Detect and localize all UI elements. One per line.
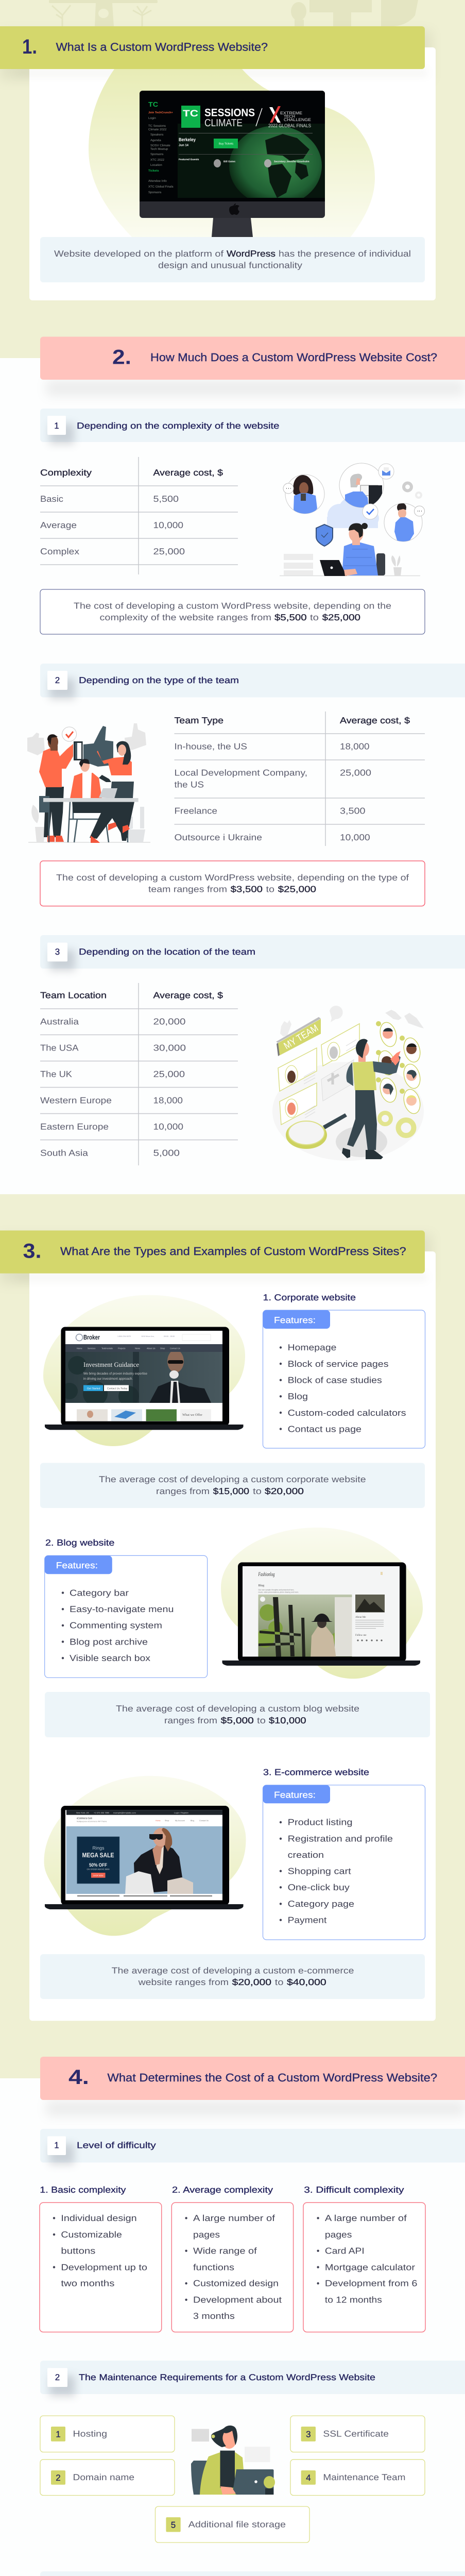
column: difficult complexity: Card API	[325, 2246, 365, 2256]
table: team location vs average cost: Australia	[40, 1017, 79, 1026]
card: maintenance team	[290, 2460, 425, 2496]
panel: blog features: Commenting system	[70, 1621, 162, 1631]
table: team type vs average cost: Average cost, $	[340, 716, 410, 725]
callout: complexity cost range: to	[310, 613, 319, 622]
table: team type vs average cost: Freelance	[174, 806, 217, 816]
column: basic complexity: two months	[61, 2279, 114, 2289]
cost box: blog website: $10,000	[269, 1716, 306, 1725]
icon: desktop monitor showing TC Sessions Climate site: Climate 2022	[148, 128, 167, 131]
panel: blog features: Blog post archive	[70, 1637, 148, 1647]
column: basic complexity: Individual design	[61, 2213, 137, 2223]
table: team type vs average cost: Outsource i Ukraine	[174, 833, 262, 842]
table: team location vs average cost	[40, 983, 238, 1165]
icon: desktop monitor showing TC Sessions Climate site: EXTREME	[280, 111, 302, 115]
laptop: corporate Broker site: News	[135, 1347, 140, 1350]
cost box: e-commerce website: $20,000	[232, 1977, 271, 1987]
panel: white card	[29, 47, 436, 300]
laptop: eCommerce Gem site: eCommerce Gem	[77, 1817, 92, 1820]
icon: desktop monitor showing TC Sessions Climate site: Join TechCrunch+	[148, 111, 173, 114]
heading: what determines the cost: What Determines the Cost of a Custom WordPress Website?	[107, 2071, 437, 2084]
cost box: corporate website: ranges from	[156, 1486, 210, 1496]
callout: team type cost range: $3,500	[231, 885, 263, 894]
table: team location vs average cost: 25,000	[153, 1070, 185, 1079]
subheading bar: complexity: Depending on the complexity of the website	[77, 421, 279, 431]
cost box: e-commerce website	[40, 1954, 425, 1999]
panel: blog features: Visible search box	[70, 1653, 151, 1663]
laptop: eCommerce Gem site: 50% OFF	[89, 1862, 107, 1868]
card: domain name: 2	[56, 2473, 61, 2483]
illustration: man picking my team profiles	[272, 1006, 424, 1161]
card: hosting: Hosting	[73, 2429, 107, 2439]
column: average complexity: pages	[193, 2230, 220, 2240]
panel: definition box	[40, 237, 425, 282]
laptop: eCommerce Gem site: My Account	[175, 1820, 185, 1822]
panel: corporate features: Features:	[274, 1315, 316, 1325]
subheading bar: complexity	[40, 409, 465, 444]
laptop: eCommerce Gem site: MEGA SALE	[82, 1852, 114, 1859]
panel: e-commerce features: Category page	[288, 1899, 354, 1909]
card: maintenance team: 4	[306, 2473, 311, 2483]
panel: e-commerce features: Payment	[288, 1915, 327, 1925]
item title: blog website: 2. Blog website	[45, 1538, 114, 1548]
illustration: woman at laptop	[191, 2426, 275, 2495]
icon: desktop monitor showing TC Sessions Climate site: Speakers	[150, 133, 163, 137]
table: complexity vs average cost: Complex	[40, 547, 80, 556]
card: domain name	[40, 2460, 175, 2496]
panel: corporate features: Contact us page	[288, 1424, 361, 1434]
laptop: Fashionlog blog site: Blog	[259, 1584, 264, 1587]
icon: desktop monitor showing TC Sessions Climate site: Attendee Info	[148, 179, 167, 183]
subheading bar: type of team	[40, 664, 465, 699]
column: average complexity: 2. Average complexity	[172, 2185, 273, 2195]
subheading bar: location of team	[40, 935, 465, 971]
subheading bar: type of team: Depending on the type of the team	[79, 675, 239, 685]
laptop: Fashionlog blog site: About Me	[355, 1616, 366, 1619]
callout: team type cost range: $25,000	[278, 885, 316, 894]
column: basic complexity	[40, 2185, 162, 2332]
definition text: Website developed on the platform of	[54, 249, 223, 259]
card: hosting	[40, 2416, 175, 2452]
table: team location vs average cost: The UK	[40, 1070, 73, 1079]
item title: corporate website: 1. Corporate website	[263, 1293, 356, 1302]
column: average complexity: Wide range of	[193, 2246, 257, 2256]
icon: desktop monitor showing TC Sessions Climate site: XTC Global Finals	[148, 185, 174, 189]
icon: desktop monitor showing TC Sessions Climate site: TC Sessions	[148, 124, 166, 128]
callout: complexity cost range	[40, 589, 425, 634]
column: difficult complexity: Development from 6	[325, 2279, 417, 2289]
number 2: 2.	[112, 346, 131, 369]
column: basic complexity: Customizable	[61, 2230, 122, 2240]
table: team type vs average cost: 3,500	[340, 806, 366, 816]
laptop: corporate Broker site: Get Started	[87, 1387, 100, 1390]
illustration blob	[89, 69, 375, 242]
laptop: Fashionlog blog site: music, video presentations, photo sharing and more.	[259, 1591, 299, 1593]
panel: e-commerce features: creation	[288, 1850, 324, 1860]
table: team location vs average cost: Average cost, $	[153, 990, 223, 1001]
card: SSL certificate: 3	[306, 2430, 311, 2439]
laptop: corporate Broker site: What we Offer	[182, 1413, 203, 1417]
heading: How Much Does a Custom WordPress Website Cost: How Much Does a Custom WordPress Website Cost?	[150, 351, 437, 364]
table: team type vs average cost: the US	[174, 780, 204, 789]
column: basic complexity: buttons	[61, 2246, 95, 2256]
panel: e-commerce features: One-click buy	[288, 1883, 350, 1892]
callout: complexity cost range: The cost of developing a custom WordPress website, depending on the	[74, 601, 391, 611]
icon: desktop monitor showing TC Sessions Climate site: TC	[148, 100, 159, 108]
subheading bar: type of team: 2	[55, 675, 60, 685]
callout: team type cost range: to	[266, 885, 274, 894]
cost box: corporate website	[40, 1463, 425, 1508]
panel: corporate features	[263, 1310, 425, 1448]
cost box: blog website: $5,000	[221, 1716, 254, 1725]
laptop: corporate Broker site: Broker	[83, 1333, 100, 1341]
icon: desktop monitor showing TC Sessions Climate site: 2022 GLOBAL FINALS	[268, 123, 311, 129]
card: hosting: 1	[56, 2430, 61, 2439]
table: complexity vs average cost: 25,000	[153, 547, 185, 556]
callout: team type cost range: team ranges from	[148, 885, 227, 894]
column: basic complexity: Development up to	[61, 2262, 147, 2272]
heading bar 2	[40, 337, 465, 380]
section 1: what is a custom WordPress website	[0, 0, 465, 358]
subheading bar: maintenance requirements	[40, 2361, 465, 2396]
laptop: eCommerce Gem site: Shop	[165, 1820, 169, 1822]
panel: e-commerce features: Registration and profile	[288, 1834, 393, 1843]
panel: corporate features: Blog	[288, 1392, 308, 1401]
table: complexity vs average cost: Complexity	[40, 468, 92, 478]
laptop: eCommerce Gem site: Contact Us	[199, 1820, 209, 1822]
laptop: eCommerce Gem site: Home	[156, 1820, 161, 1822]
table: team location vs average cost: South Asia	[40, 1148, 89, 1158]
item title: e-commerce website: 3. E-commerce website	[263, 1768, 369, 1777]
table: team type vs average cost: 18,000	[340, 742, 370, 752]
column: average complexity: A large number of	[193, 2213, 275, 2223]
icon: desktop monitor showing TC Sessions Climate site	[140, 91, 325, 237]
cost box: corporate website: to	[253, 1486, 262, 1496]
card: additional file storage: Additional file storage	[188, 2519, 286, 2530]
table: team location vs average cost: The USA	[40, 1043, 79, 1053]
laptop: corporate Broker site: Services	[88, 1347, 95, 1350]
laptop: eCommerce Gem site: +1 570 456 7890	[94, 1811, 110, 1814]
panel: blog features: Easy-to-navigate menu	[70, 1604, 174, 1614]
laptop: Fashionlog blog site: Follow me	[355, 1634, 367, 1637]
table: team location vs average cost: Team Location	[40, 990, 107, 1001]
column: average complexity	[171, 2185, 294, 2332]
number 3: 3.	[23, 1240, 41, 1262]
icon: desktop monitor showing TC Sessions Climate site: Buy Tickets	[219, 142, 233, 145]
definition text: has the presence of individual	[279, 249, 411, 259]
shadow of heading bar	[0, 31, 432, 80]
cost box: corporate website: $15,000	[213, 1486, 249, 1496]
column: difficult complexity: Mortgage calculator	[325, 2262, 415, 2272]
table: team location vs average cost: 18,000	[153, 1095, 183, 1106]
laptop: Fashionlog blog site: Fashionlog	[258, 1571, 275, 1578]
icon: desktop monitor showing TC Sessions Climate site: Sponsors	[150, 152, 163, 156]
icon: desktop monitor showing TC Sessions Climate site: CHALLENGE	[284, 117, 311, 122]
cost box: e-commerce website: website ranges from	[137, 1977, 229, 1987]
subheading bar: location of team: Depending on the location of the team	[79, 947, 255, 957]
laptop: eCommerce Gem site: Blog	[191, 1820, 194, 1822]
heading: What Is a Custom WordPress Website: What Is a Custom WordPress Website?	[56, 41, 268, 54]
column: average complexity: 3 months	[193, 2311, 235, 2321]
panel: corporate features: Homepage	[288, 1343, 336, 1352]
column: difficult complexity: 3. Difficult complexity	[304, 2185, 404, 2195]
column: difficult complexity: to 12 months	[325, 2295, 382, 2305]
laptop: eCommerce Gem site: Rings	[92, 1845, 105, 1851]
table: team type vs average cost	[174, 711, 425, 846]
table: team type vs average cost: 25,000	[340, 768, 371, 778]
subheading bar: complexity: 1	[54, 421, 59, 431]
cost box: blog website: to	[257, 1716, 266, 1725]
number 1: 1.	[22, 36, 37, 58]
subheading bar: level of difficulty: 1	[54, 2141, 59, 2150]
table: team type vs average cost: 10,000	[340, 833, 370, 842]
laptop: corporate Broker site: Contact Us Today	[107, 1387, 128, 1390]
table: complexity vs average cost: Average cost, $	[153, 468, 223, 478]
blob behind blog laptop	[221, 1528, 423, 1679]
laptop: corporate Broker site: Contact Us	[170, 1347, 180, 1350]
table: team location vs average cost: 30,000	[153, 1043, 186, 1053]
column: basic complexity: 1. Basic complexity	[40, 2185, 126, 2195]
cost box: e-commerce website: to	[275, 1977, 283, 1987]
panel: blog features: Category bar	[70, 1588, 129, 1598]
section 4: what determines the cost	[0, 2057, 465, 2576]
laptop: eCommerce Gem site: ON ORDER ABOVE $999	[87, 1868, 109, 1870]
subheading bar: maintenance requirements: 2	[55, 2372, 60, 2382]
panel: corporate features: Block of service pages	[288, 1359, 388, 1369]
section 2: how much does it cost	[0, 337, 465, 1194]
icon: desktop monitor showing TC Sessions Climate site: Login	[148, 116, 156, 120]
column: average complexity: Development about	[193, 2295, 282, 2305]
subheading bar: location of team: 3	[55, 947, 60, 957]
table: complexity vs average cost: Basic	[40, 494, 64, 504]
section 3: types and examples	[0, 1194, 465, 2078]
icon: desktop monitor showing TC Sessions Climate site: Tech Meetup	[150, 147, 168, 151]
callout: team type cost range	[40, 861, 425, 906]
callout: complexity cost range: $5,500	[274, 613, 307, 622]
table: team location vs average cost: 5,000	[153, 1148, 180, 1158]
laptop: eCommerce Gem site: New York, US	[76, 1811, 89, 1814]
table: team type vs average cost: Local Development Company,	[174, 768, 307, 778]
table: complexity vs average cost: 5,500	[153, 494, 179, 504]
laptop: corporate Broker site: 09:00 - 18:00	[164, 1335, 175, 1337]
definition text	[54, 249, 411, 270]
icon: desktop monitor showing TC Sessions Climate site: Bill Gates	[223, 160, 235, 163]
callout: complexity cost range: complexity of the website ranges from	[100, 613, 271, 622]
panel: e-commerce features: Features:	[274, 1790, 316, 1800]
panel: e-commerce features	[263, 1785, 425, 1940]
subheading bar: maintenance requirements: The Maintenance Requirements for a Custom WordPress Website	[79, 2372, 375, 2382]
panel: corporate features: Block of case studies	[288, 1376, 382, 1385]
table: team type vs average cost: In-house, the US	[174, 742, 247, 752]
icon: desktop monitor showing TC Sessions Climate site: Location	[150, 163, 162, 167]
number 4: 4.	[68, 2066, 89, 2089]
table: team location vs average cost: Western Europe	[40, 1095, 112, 1106]
laptop: Fashionlog blog site: Our own sample thoughts and presented here,	[259, 1589, 294, 1591]
table: team location vs average cost: Eastern Europe	[40, 1122, 109, 1131]
laptop: corporate Broker site: 1010 Moon Ave,	[141, 1335, 154, 1337]
laptop: corporate Broker site: Investment Guidance	[83, 1361, 139, 1368]
card: SSL certificate	[290, 2416, 425, 2452]
callout: complexity cost range: $25,000	[322, 613, 360, 622]
laptop: eCommerce Gem site	[45, 1806, 243, 1909]
background decorative illustration	[49, 0, 418, 26]
callout: team type cost range: The cost of developing a custom WordPress website, depending on the type of	[56, 873, 409, 883]
column: average complexity: functions	[193, 2262, 234, 2272]
laptop: corporate Broker site: Shop	[160, 1347, 165, 1350]
laptop: eCommerce Gem site: example@templatic.com	[113, 1811, 136, 1814]
subheading bar: marketing	[40, 2571, 465, 2576]
panel: e-commerce features: Product listing	[288, 1818, 353, 1827]
cost box: corporate website: The average cost of developing a custom corporate website	[99, 1475, 366, 1484]
table: complexity vs average cost: 10,000	[153, 520, 183, 530]
table: team location vs average cost: 20,000	[153, 1017, 185, 1026]
icon: desktop monitor showing TC Sessions Climate site: TECH	[284, 114, 295, 118]
icon: desktop monitor showing TC Sessions Climate site: Agenda	[150, 139, 161, 142]
table: team location vs average cost: 10,000	[153, 1122, 183, 1131]
card: additional file storage: 5	[171, 2520, 176, 2530]
blob behind e-commerce laptop	[44, 1776, 246, 1936]
panel: corporate features: Custom-coded calculators	[288, 1408, 406, 1418]
panel: blog features	[45, 1555, 208, 1677]
laptop: corporate Broker site: Home	[77, 1347, 82, 1350]
cost box: corporate website: $20,000	[265, 1486, 304, 1496]
laptop: Fashionlog blog site	[222, 1562, 420, 1666]
heading bar 1	[0, 26, 425, 69]
column: difficult complexity	[303, 2185, 425, 2332]
laptop: corporate Broker site: in driving our investment approach.	[83, 1377, 133, 1381]
cost box: e-commerce website: $40,000	[287, 1977, 326, 1987]
laptop: corporate Broker site: About Us	[147, 1347, 155, 1350]
icon: desktop monitor showing TC Sessions Climate site: Secretary Jennifer Granholm	[274, 160, 309, 163]
panel: blog features: Features:	[56, 1561, 98, 1570]
heading: types and examples: What Are the Types and Examples of Custom WordPress Sites?	[60, 1245, 406, 1258]
subheading bar: level of difficulty	[40, 2129, 465, 2164]
card: additional file storage	[156, 2506, 309, 2543]
cost box: e-commerce website: The average cost of developing a custom e-commerce	[112, 1965, 354, 1975]
laptop: corporate Broker site: Testimonials	[101, 1347, 113, 1350]
column: difficult complexity: pages	[325, 2230, 352, 2240]
laptop: eCommerce Gem site: SHOP NOW	[93, 1874, 104, 1876]
icon: desktop monitor showing TC Sessions Climate site: SESSIONS	[204, 107, 255, 119]
icon: desktop monitor showing TC Sessions Climate site: Tickets	[148, 169, 159, 173]
laptop: corporate Broker site: We bring decades of proven industry expertise	[83, 1372, 147, 1376]
illustration: man picking my team profiles: MY TEAM	[282, 1023, 320, 1052]
icon: desktop monitor showing TC Sessions Climate site: Jun 14	[179, 144, 189, 147]
icon: desktop monitor showing TC Sessions Climate site: Sponsors	[148, 191, 161, 194]
illustration: people with blue shirts in circles	[280, 463, 424, 576]
laptop: corporate Broker site: Projects	[118, 1347, 125, 1350]
column: difficult complexity: A large number of	[325, 2213, 407, 2223]
panel: e-commerce features: Shopping cart	[288, 1866, 351, 1876]
table: complexity vs average cost: Average	[40, 520, 77, 530]
icon: desktop monitor showing TC Sessions Climate site: TC	[183, 108, 198, 118]
icon: desktop monitor showing TC Sessions Climate site: Featured Guests	[179, 158, 199, 161]
laptop: corporate Broker site: 1-800-234-5678	[117, 1335, 131, 1337]
table: complexity vs average cost	[40, 457, 238, 574]
table: team type vs average cost: Team Type	[174, 716, 223, 725]
icon: desktop monitor showing TC Sessions Climate site: SOSV Climate	[150, 144, 170, 147]
subheading bar: level of difficulty: Level of difficulty	[77, 2141, 156, 2150]
column: average complexity: Customized design	[193, 2279, 279, 2289]
heading bar 4	[40, 2057, 465, 2100]
card: SSL certificate: SSL Certificate	[323, 2429, 389, 2439]
cost box: blog website: ranges from	[164, 1716, 217, 1725]
definition text: design and unusual functionality	[158, 261, 303, 270]
card: maintenance team: Maintenance Team	[323, 2472, 405, 2482]
icon: desktop monitor showing TC Sessions Climate site: Berkeley	[179, 137, 196, 142]
blob behind corporate laptop	[43, 1295, 245, 1446]
TC logo tile	[181, 106, 200, 128]
card: domain name: Domain name	[73, 2472, 134, 2482]
laptop: eCommerce Gem site: Login / Register	[174, 1811, 189, 1814]
definition text: WordPress	[227, 249, 275, 259]
icon: desktop monitor showing TC Sessions Climate site: CLIMATE	[204, 117, 243, 129]
cost box: blog website	[45, 1692, 430, 1737]
heading bar 3	[0, 1230, 425, 1274]
laptop: corporate Broker site	[45, 1327, 243, 1430]
illustration: team around a thumbs up	[27, 723, 150, 843]
icon: desktop monitor showing TC Sessions Climate site: XTC 2022	[150, 158, 165, 162]
panel: white card	[29, 1251, 436, 2021]
cost box: blog website: The average cost of developing a custom blog website	[116, 1704, 359, 1714]
laptop: eCommerce Gem site: Multipurpose eCommerce WP Theme	[77, 1821, 107, 1823]
